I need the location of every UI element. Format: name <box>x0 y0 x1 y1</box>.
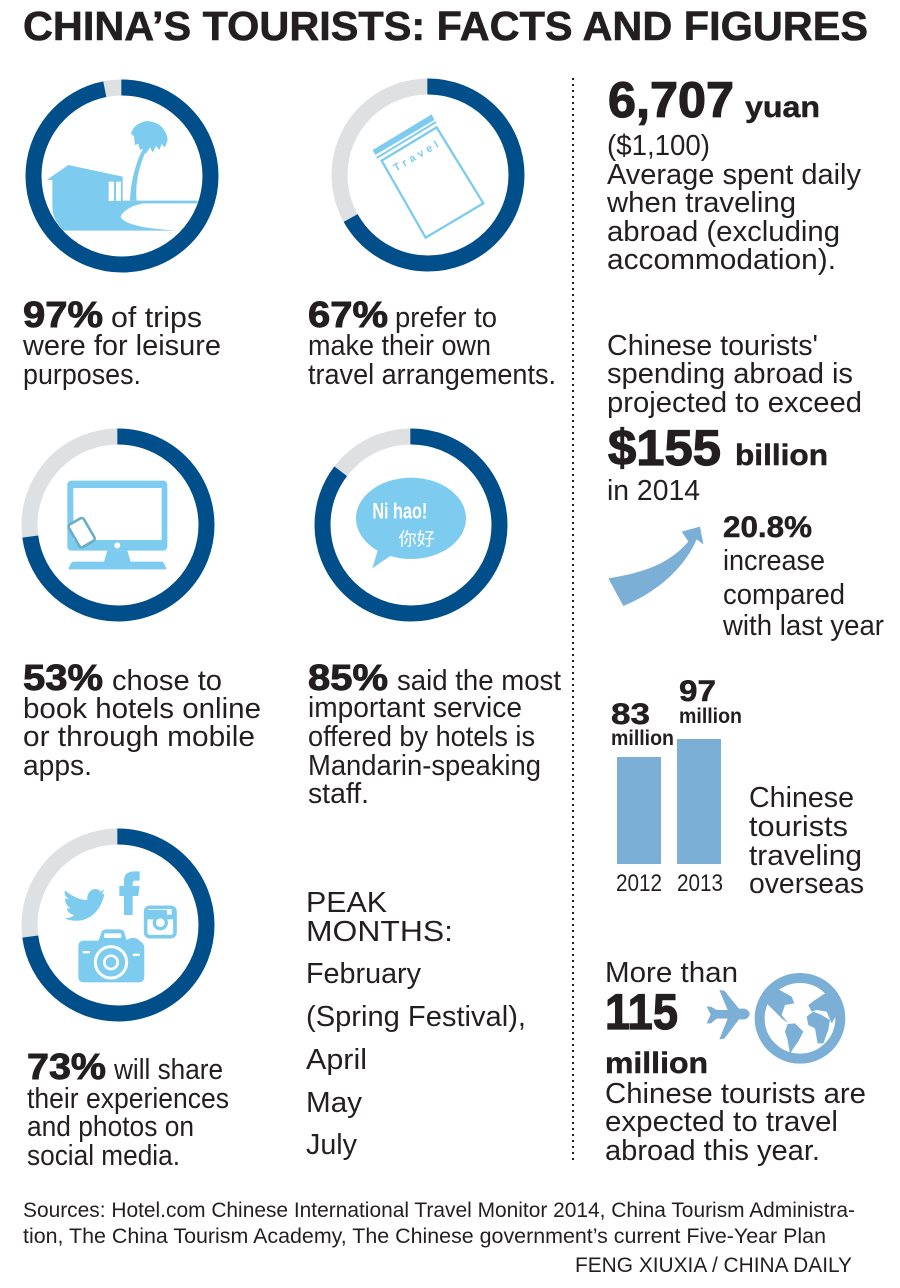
icon: beach house and palm <box>47 121 199 231</box>
text block: projected spending <box>607 330 862 507</box>
text block: peak months: July <box>306 1129 357 1161</box>
donut chart: 67% <box>340 86 516 264</box>
text: 73% will share <box>27 1046 229 1172</box>
text: 97% of trips: purposes. <box>23 359 141 391</box>
text: 53% chose: chose to <box>112 665 222 697</box>
text block: peak months <box>306 887 526 1161</box>
panel: 85% Mandarin-speaking staff <box>308 436 561 810</box>
bar: 2013: million <box>679 705 742 728</box>
icon: speech bubble: Ni hao! <box>372 499 427 524</box>
text block: daily spending: abroad (excluding <box>607 216 840 248</box>
text block: projected spending: spending abroad is <box>607 358 853 390</box>
donut chart: 97% <box>34 88 210 264</box>
text: 67% prefer: make their own <box>308 330 491 362</box>
text: 85% said: Mandarin-speaking <box>308 750 541 782</box>
donut chart: 85% <box>322 436 500 614</box>
bar: 2012: million <box>611 727 674 750</box>
text block: projected spending: Chinese tourists' <box>607 330 818 362</box>
bar chart: tourists overseas <box>611 675 742 897</box>
arrow: rising increase <box>608 527 703 606</box>
text: 53% chose: book hotels online <box>23 693 261 725</box>
text block: daily spending <box>606 72 861 276</box>
text: 53% chose: or through mobile <box>23 721 255 753</box>
text block: chart caption: tourists <box>749 811 848 843</box>
text block: projected spending: $155 <box>608 420 721 476</box>
title: CHINA’S TOURISTS: FACTS AND FIGURES <box>23 3 868 49</box>
icon: speech bubble <box>356 478 466 568</box>
text block: 115 million: Chinese tourists are <box>605 1078 866 1110</box>
text: 97% of trips: were for leisure <box>22 330 221 362</box>
text block: sources: Sources: Hotel.com Chinese International Travel Monitor 2014, China Tourism Administra- <box>23 1199 855 1222</box>
text: 97% of trips <box>22 294 221 391</box>
text block: 20.8% increase <box>722 511 884 642</box>
text block: daily spending: accommodation). <box>607 244 836 276</box>
icon: social media and camera <box>64 871 175 982</box>
text block: peak months: February <box>306 958 421 990</box>
donut chart: 73% <box>30 836 206 1014</box>
text block: projected spending: projected to exceed <box>607 387 862 419</box>
text block: 115 million: expected to travel <box>605 1106 838 1138</box>
text block: daily spending: when traveling <box>606 187 796 219</box>
text: 67% prefer: prefer to <box>395 302 497 334</box>
text block: 115 million: More than <box>605 957 738 989</box>
text: 73% will share: and photos on <box>27 1111 194 1143</box>
text: 73% will share: social media. <box>27 1140 180 1172</box>
text: 53% chose: apps. <box>23 750 92 782</box>
text block: chart caption: overseas <box>749 868 864 900</box>
text block: chart caption: Chinese <box>749 782 854 814</box>
text block: chart caption: traveling <box>749 840 862 872</box>
icon: speech bubble: 你好 <box>398 528 435 549</box>
panel: 73% social media <box>27 836 229 1172</box>
text: 53% chose <box>23 657 261 782</box>
text: 73% will share: their experiences <box>27 1083 229 1115</box>
bar: 2013: 97 <box>679 675 716 708</box>
bar: 2012: 2012 <box>616 870 662 897</box>
text: 67% prefer <box>308 294 556 391</box>
text: 73% will share: will share <box>113 1054 223 1086</box>
text block: sources <box>23 1199 855 1248</box>
text: 85% said: staff. <box>308 778 369 810</box>
text block: daily spending: yuan <box>745 91 820 124</box>
text block: projected spending: in 2014 <box>607 475 700 507</box>
text block: 115 million: 115 <box>605 984 678 1040</box>
icon: computer monitor and phone <box>67 481 167 569</box>
text block: 20.8% increase: with last year <box>722 610 884 642</box>
text: 85% said <box>308 657 561 810</box>
panel: 53% book online <box>23 436 261 782</box>
text: 67% prefer: 67% <box>308 294 388 335</box>
text: 85% said: important service <box>308 692 522 724</box>
panel: 67% own arrangements <box>308 86 556 391</box>
text block: sources: tion, The China Tourism Academy, The Chinese government’s current Five-Year Plan <box>23 1225 826 1248</box>
text block: peak months: PEAK <box>306 887 388 919</box>
text block: projected spending: billion <box>735 439 828 472</box>
bar: 2012 <box>611 698 674 897</box>
text: 67% prefer: travel arrangements. <box>308 359 556 391</box>
text block: 115 million <box>605 957 866 1167</box>
text: 53% chose: 53% <box>23 657 103 698</box>
icon: travel document: Travel <box>391 139 441 174</box>
text: 85% said: 85% <box>308 657 388 698</box>
text block: 115 million: abroad this year. <box>605 1135 820 1167</box>
text: 85% said: offered by hotels is <box>308 721 535 753</box>
text block: daily spending: Average spent daily <box>607 159 861 191</box>
text block: 20.8% increase: 20.8% <box>723 511 812 544</box>
donut chart: 53% <box>30 436 206 614</box>
panel: 97% leisure trips <box>22 88 221 391</box>
icon: plane and globe <box>707 978 844 1059</box>
bar: 2012: 83 <box>611 698 650 731</box>
text block: peak months: May <box>306 1087 362 1119</box>
bar: 2013 <box>677 675 742 897</box>
text block: chart caption <box>749 782 864 900</box>
text block: daily spending: 6,707 <box>608 72 734 128</box>
icon: travel document <box>373 114 483 238</box>
text block: peak months: April <box>306 1044 367 1076</box>
bar: 2013: 2013 <box>677 870 723 897</box>
text: 97% of trips: 97% <box>23 294 103 335</box>
text block: credit: FENG XIUXIA / CHINA DAILY <box>575 1254 852 1277</box>
text block: 20.8% increase: compared <box>723 579 845 611</box>
text block: 20.8% increase: increase <box>723 545 825 577</box>
text: 73% will share: 73% <box>27 1046 106 1087</box>
text: 97% of trips: of trips <box>111 302 202 334</box>
text block: peak months: MONTHS: <box>306 916 453 948</box>
text: 85% said: said the most <box>397 665 561 697</box>
text block: 115 million: million <box>605 1047 708 1080</box>
text block: peak months: (Spring Festival), <box>306 1001 526 1033</box>
text block: daily spending: ($1,100) <box>607 130 710 162</box>
